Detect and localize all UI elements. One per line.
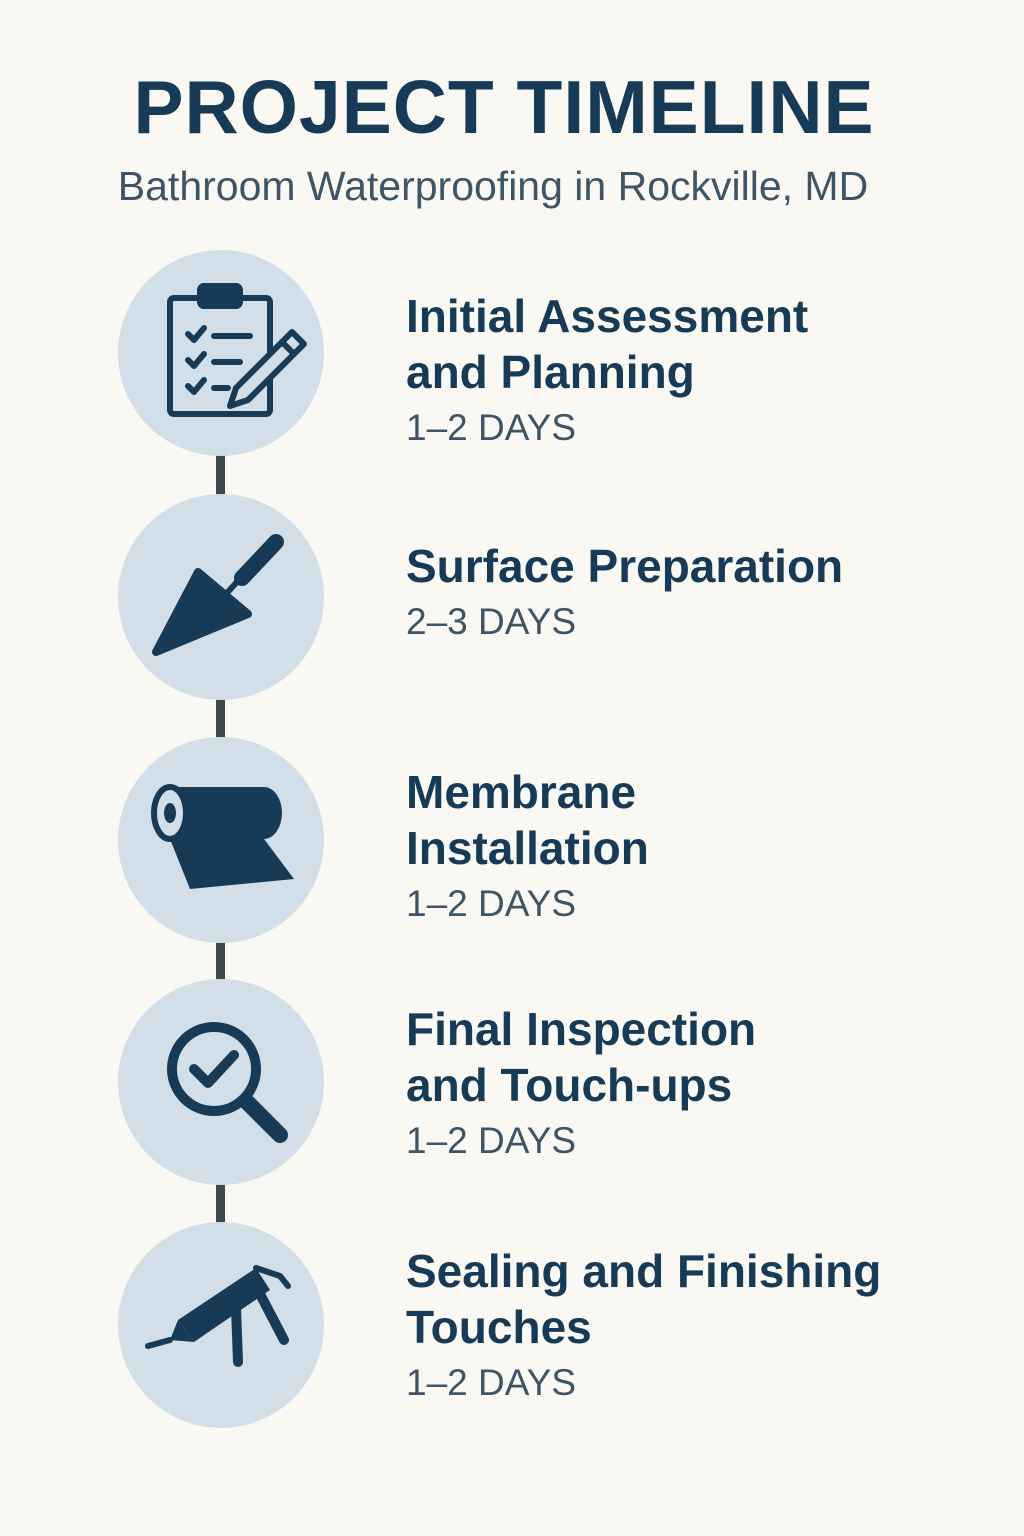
connector 1 — [216, 455, 225, 495]
text: step 5 — [406, 1245, 881, 1403]
text: step 1: 1–2 DAYS — [406, 407, 576, 448]
connector 3 — [216, 942, 225, 982]
text: step 3: Membrane — [406, 766, 636, 818]
text: step 4: Final Inspection — [406, 1003, 756, 1055]
icon: caulk gun — [118, 1222, 324, 1428]
text: step 5: Sealing and Finishing — [406, 1245, 881, 1297]
text: step 4: 1–2 DAYS — [406, 1120, 576, 1161]
text: step 1: Initial Assessment — [406, 290, 808, 342]
icon: membrane roll — [118, 737, 324, 943]
text: step 2: 2–3 DAYS — [406, 601, 576, 642]
icon: trowel — [118, 494, 324, 700]
text: step 3 — [406, 766, 649, 924]
text: step 5: Touches — [406, 1301, 592, 1353]
connector 4 — [216, 1184, 225, 1224]
text: step 4: and Touch-ups — [406, 1059, 732, 1111]
text: step 5: 1–2 DAYS — [406, 1362, 576, 1403]
text: step 3: Installation — [406, 822, 649, 874]
text: step 3: 1–2 DAYS — [406, 883, 576, 924]
connector 2 — [216, 699, 225, 739]
text: step 2 — [406, 540, 843, 642]
text: step 4 — [406, 1003, 756, 1161]
text: step 1: and Planning — [406, 346, 695, 398]
title: PROJECT TIMELINE — [133, 65, 875, 149]
text: step 1 — [406, 290, 808, 448]
icon: clipboard — [118, 250, 324, 456]
subtitle: Bathroom Waterproofing in Rockville, MD — [118, 163, 868, 209]
icon: magnifier check — [118, 979, 324, 1185]
text: step 2: Surface Preparation — [406, 540, 843, 592]
